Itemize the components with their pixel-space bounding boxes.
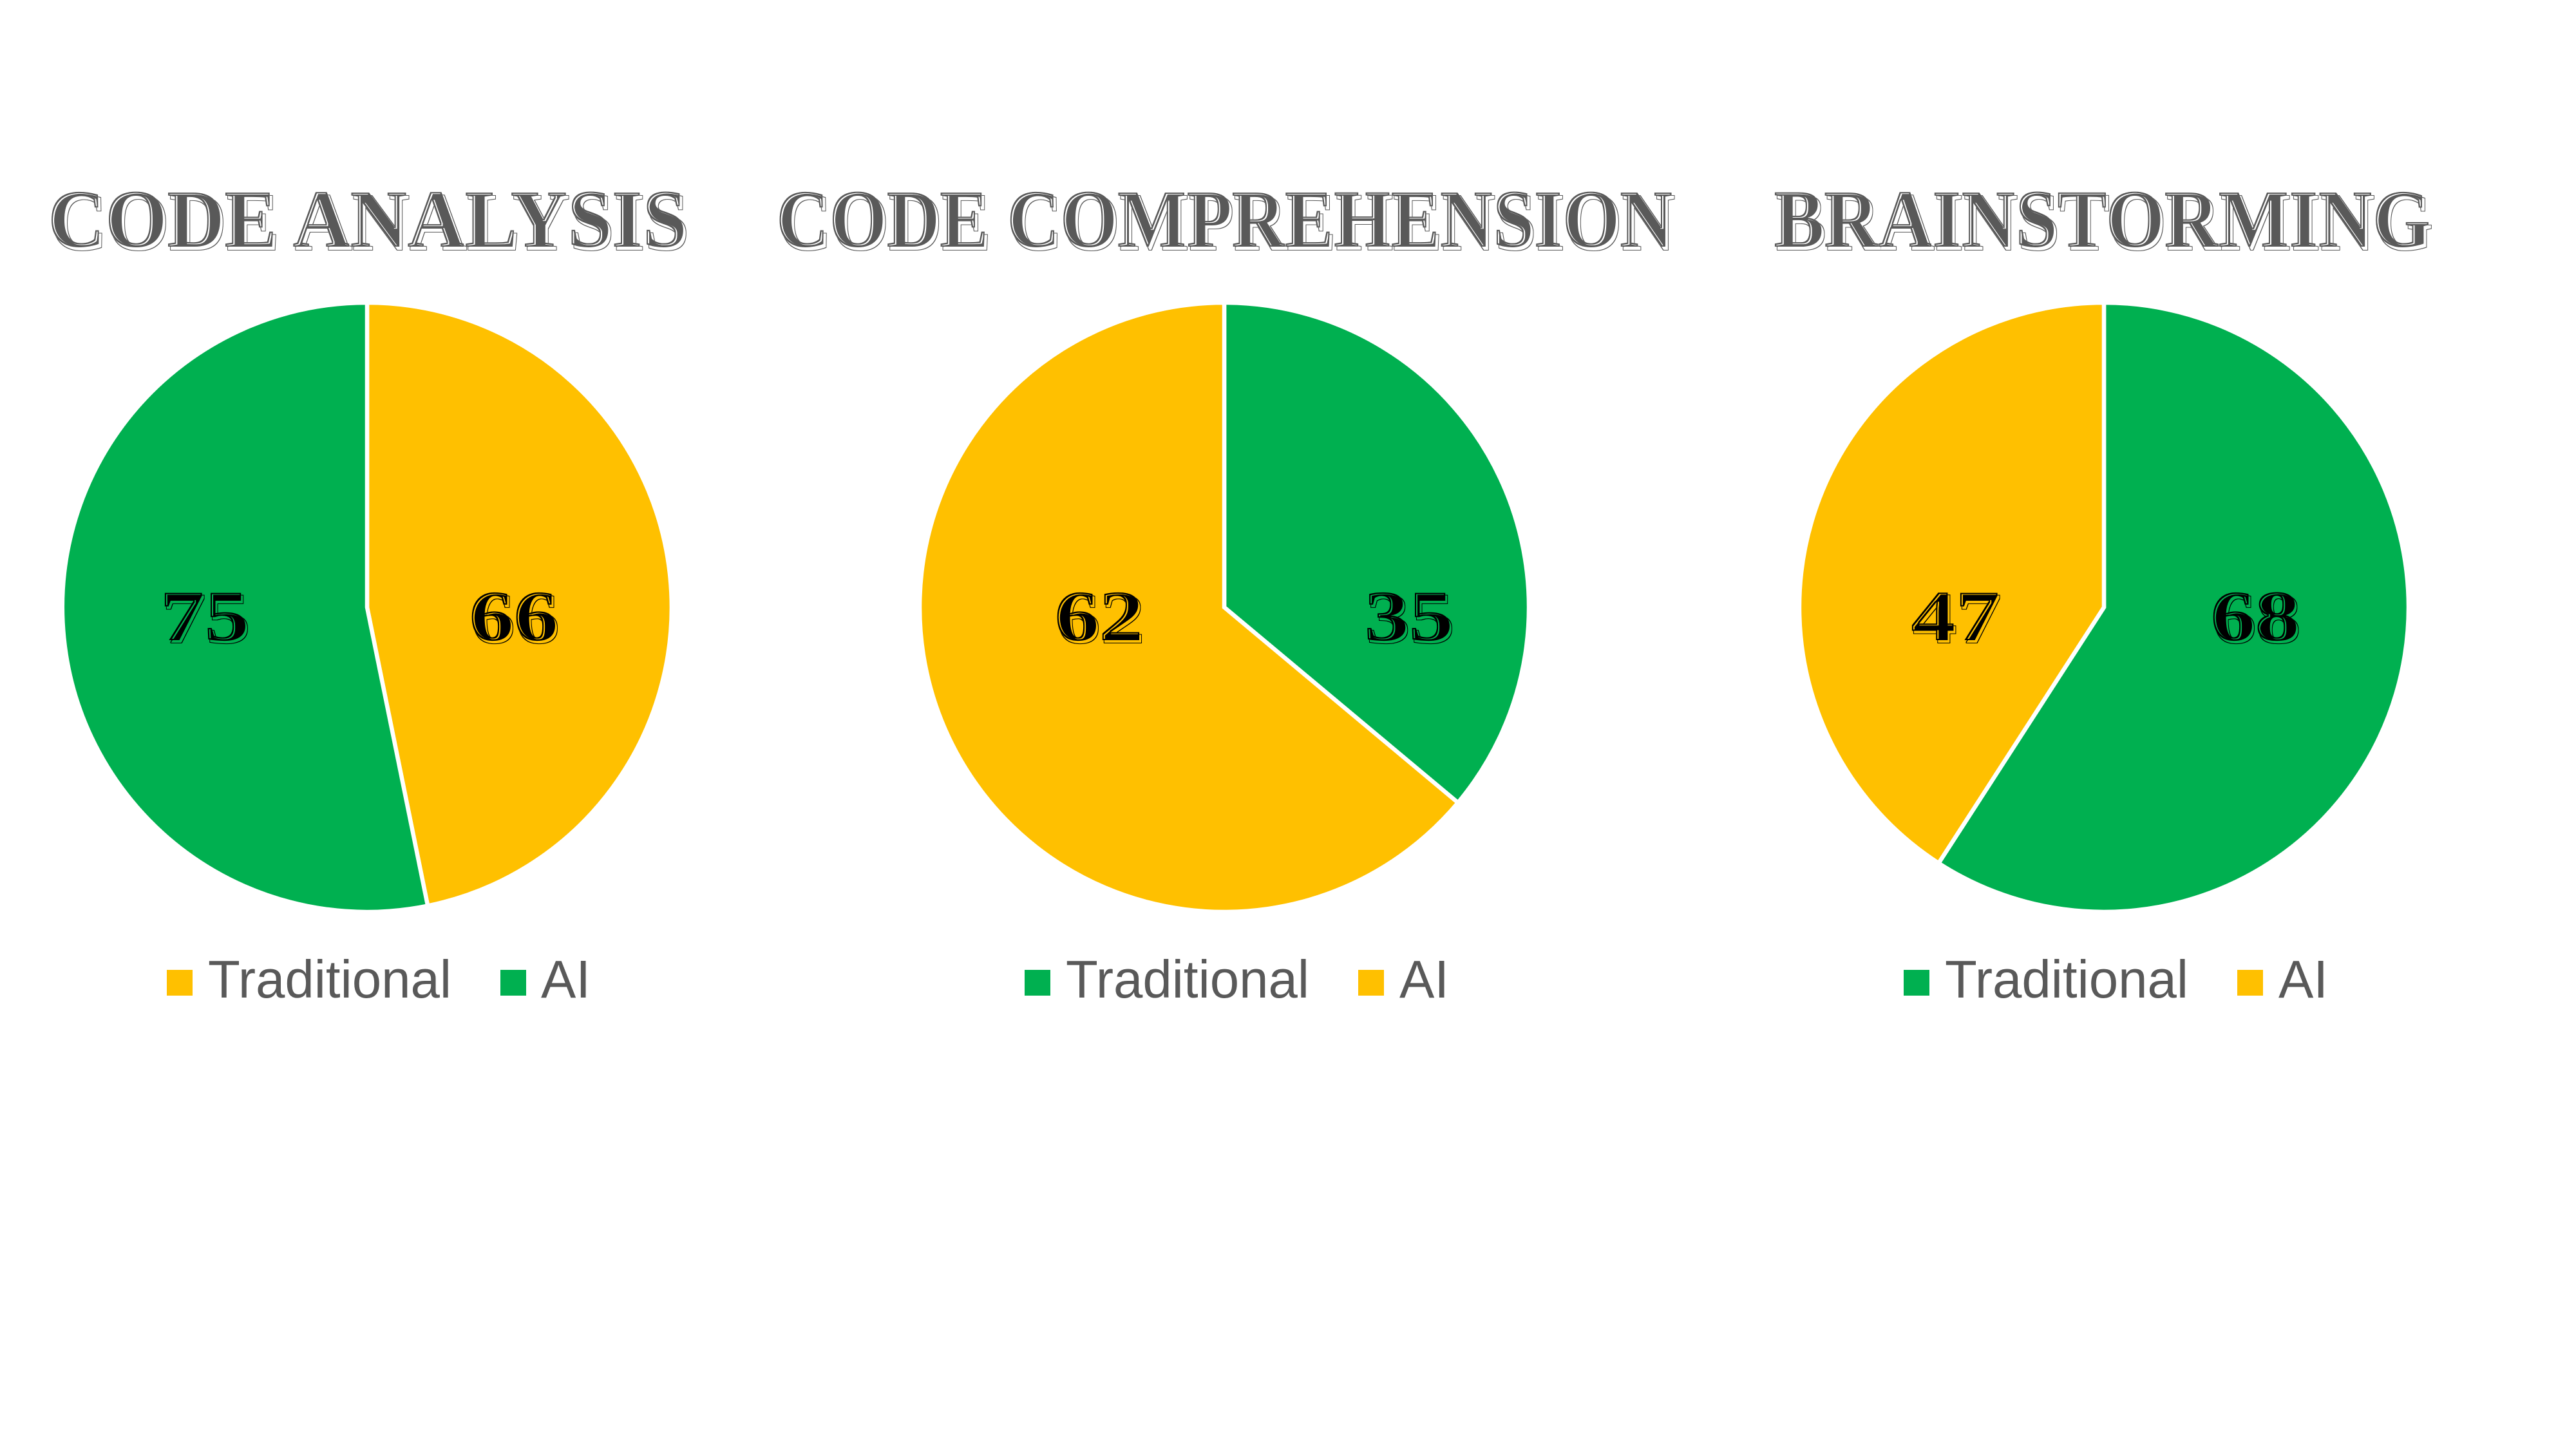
slice: AI 75 (62, 303, 428, 912)
heading: code comprehension: CODE COMPREHENSION (776, 173, 1672, 265)
heading: brainstorming: BRAINSTORMING (1774, 173, 2430, 265)
legend: code comprehension (1025, 949, 1449, 1009)
value: traditional 35: 35 (1364, 576, 1453, 656)
value: AI 62: 62 (1054, 576, 1143, 656)
value: AI 47: 47 (1911, 576, 2000, 656)
legend label: AI: AI (2278, 949, 2328, 1009)
panel: code comprehension (776, 173, 1672, 1009)
panel: brainstorming (1774, 173, 2430, 1009)
legend swatch: traditional (167, 970, 193, 996)
legend label: traditional: Traditional (1945, 949, 2188, 1009)
panel: code analysis (48, 173, 687, 1009)
legend swatch: traditional (1025, 970, 1050, 996)
value: traditional 66: 66 (469, 576, 558, 656)
legend label: traditional: Traditional (208, 949, 451, 1009)
legend swatch: AI (500, 970, 526, 996)
pie chart: brainstorming (1799, 303, 2409, 912)
legend: brainstorming (1904, 949, 2328, 1009)
slice: traditional 35 (1224, 303, 1529, 802)
legend label: traditional: Traditional (1066, 949, 1309, 1009)
legend swatch: AI (1358, 970, 1384, 996)
legend label: AI: AI (1399, 949, 1449, 1009)
legend label: AI: AI (541, 949, 591, 1009)
legend swatch: AI (2237, 970, 2263, 996)
pie chart: code analysis (62, 303, 672, 912)
legend: code analysis (167, 949, 591, 1009)
slice: AI 62 (920, 303, 1458, 912)
value: traditional 68: 68 (2210, 576, 2299, 656)
slice: traditional 68 (1938, 303, 2409, 912)
value: AI 75: 75 (160, 576, 249, 656)
slice: AI 47 (1799, 303, 2104, 863)
pie chart: code comprehension (920, 303, 1529, 912)
legend swatch: traditional (1904, 970, 1929, 996)
heading: code analysis: CODE ANALYSIS (48, 173, 687, 265)
slice: traditional 66 (367, 303, 672, 905)
